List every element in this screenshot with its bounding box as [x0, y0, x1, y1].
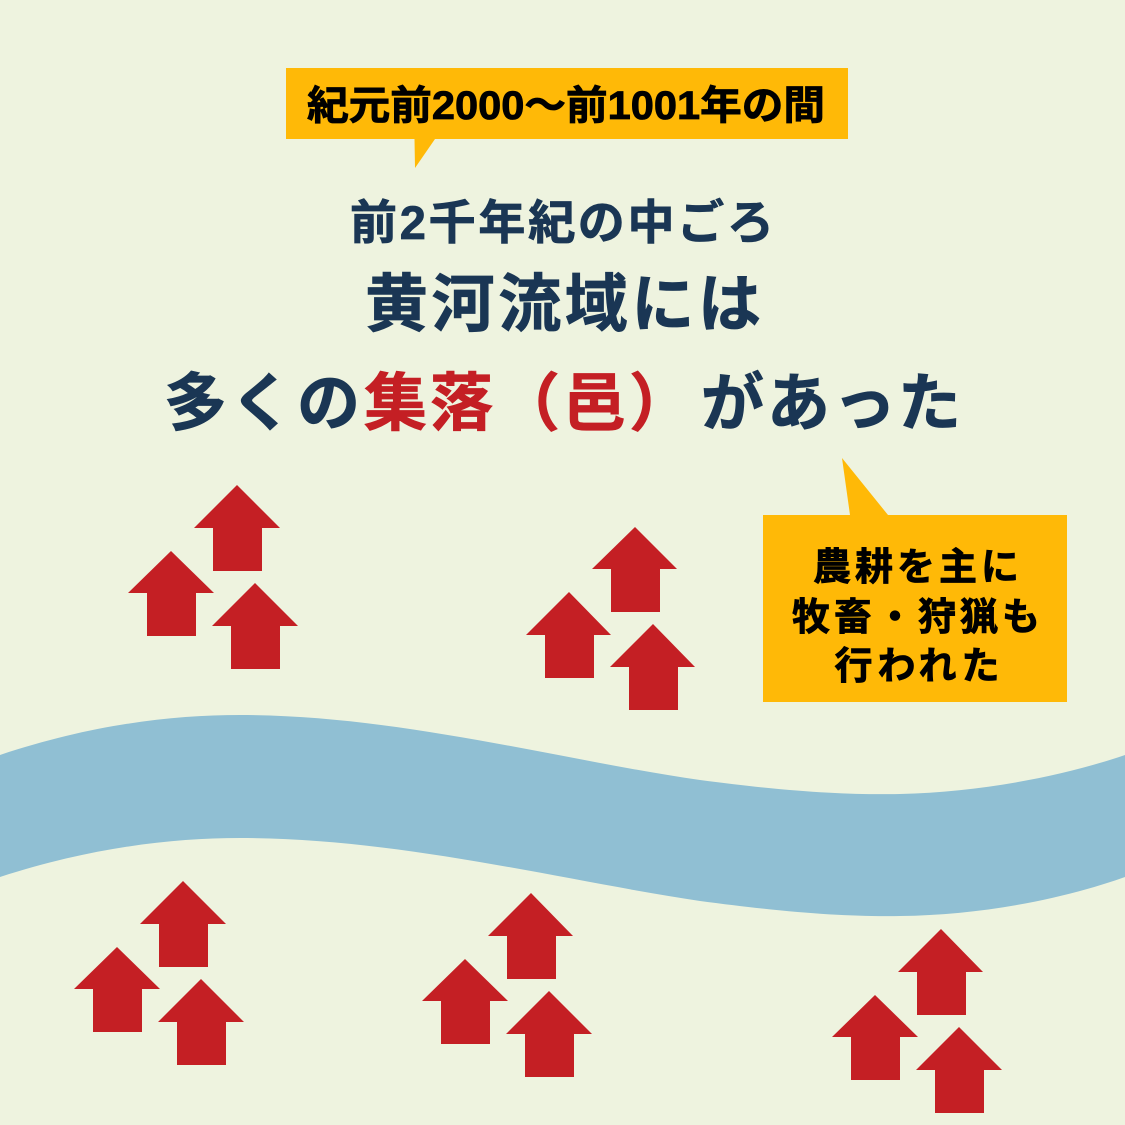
title line 2: 多くの [164, 369, 360, 439]
subtitle: 前2千年紀の中ごろ [350, 196, 774, 249]
callout text line 2: 牧畜・狩猟も [792, 597, 1040, 639]
title line 2: 集落（邑） [364, 369, 692, 439]
date callout: 紀元前2000～前1001年の間 [307, 84, 825, 128]
settlement group: upper center [526, 527, 695, 710]
farming callout [763, 458, 1067, 702]
river [0, 715, 1125, 916]
callout text line 3: 行われた [834, 646, 1000, 688]
title line 1: 黄河流域には [365, 270, 761, 340]
settlement group: lower left [74, 881, 244, 1065]
callout text line 1: 農耕を主に [813, 547, 1019, 589]
date callout [286, 68, 848, 168]
title line 2: があった [701, 369, 961, 439]
settlement group: upper left [128, 485, 298, 669]
settlement group: lower center [422, 893, 592, 1077]
settlement group: lower right [832, 929, 1002, 1113]
